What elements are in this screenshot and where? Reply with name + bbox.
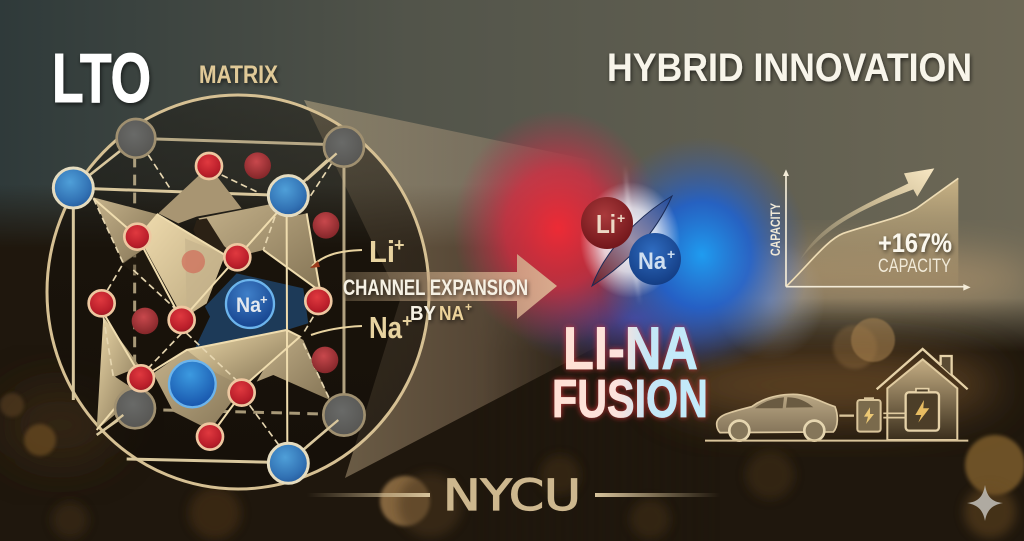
ground line — [705, 438, 968, 444]
Li and Na fusion icon — [581, 196, 681, 286]
axes — [786, 174, 965, 287]
growth arrow — [800, 168, 934, 260]
Li and Na fusion icon: Li — [596, 209, 616, 239]
bokeh lights — [0, 318, 1024, 539]
large blue atom — [169, 361, 216, 407]
heading: LI-NA FUSION — [552, 315, 708, 429]
Li and Na fusion icon: Na — [638, 248, 667, 275]
label: Na+ with pointer — [311, 310, 413, 345]
Na+ atom — [226, 280, 274, 328]
label: Li+ with pointer — [310, 234, 405, 269]
icon: small battery — [857, 397, 881, 432]
Li and Na fusion icon: + — [667, 246, 675, 262]
bonds — [93, 198, 320, 443]
blue atoms — [53, 168, 308, 483]
area under curve — [786, 178, 958, 287]
arrow label: NA — [439, 303, 464, 325]
label: Na+ with pointer: Na — [369, 310, 403, 345]
arrow label: BY — [410, 303, 437, 325]
capacity chart — [767, 168, 971, 291]
title: HYBRID INNOVATION: HYBRID INNOVATION — [607, 46, 972, 90]
Li and Na fusion icon: + — [617, 210, 625, 226]
subtitle: MATRIX: MATRIX — [199, 61, 278, 89]
gray atoms — [115, 119, 365, 436]
capacity caption: CAPACITY — [878, 256, 951, 277]
Na+ atom label: Na — [236, 294, 261, 317]
icon: car — [717, 394, 837, 441]
cube frame — [73, 138, 344, 463]
heading: LI-NA FUSION: LI-NA — [563, 315, 698, 382]
car, battery and house icons — [705, 349, 968, 441]
label: Li+ with pointer: Li — [369, 234, 395, 269]
crystal lattice — [53, 119, 365, 483]
arrow label: + — [465, 300, 472, 314]
heading: LI-NA FUSION: FUSION — [552, 369, 708, 429]
+167% value: +167% — [878, 228, 952, 258]
logo: NYCU with side rules: NYCU — [443, 471, 581, 521]
dull red atoms — [132, 152, 339, 373]
red atoms — [89, 153, 331, 450]
label: Na+ with pointer: + — [402, 311, 413, 331]
arrow label — [343, 275, 528, 325]
icon: large battery — [906, 389, 939, 431]
logo: NYCU with side rules — [307, 471, 720, 521]
arrow label: CHANNEL EXPANSION — [343, 275, 528, 300]
title: LTO: LTO — [52, 39, 151, 117]
y axis label: CAPACITY — [767, 203, 783, 256]
icon: connector — [883, 413, 906, 418]
arrow: channel expansion — [345, 254, 557, 319]
label: Li+ with pointer: + — [394, 235, 405, 255]
icon: house — [877, 349, 968, 440]
lens circle with crystal structure — [47, 95, 429, 489]
zoom cone from crystal lens to fusion — [304, 100, 600, 478]
Na+ atom label plus sign: + — [260, 292, 268, 307]
polyhedra — [158, 166, 242, 223]
icon: sparkle watermark — [967, 485, 1003, 521]
icon: cable — [839, 412, 854, 419]
fusion glow: red and blue energy burst — [453, 110, 825, 373]
